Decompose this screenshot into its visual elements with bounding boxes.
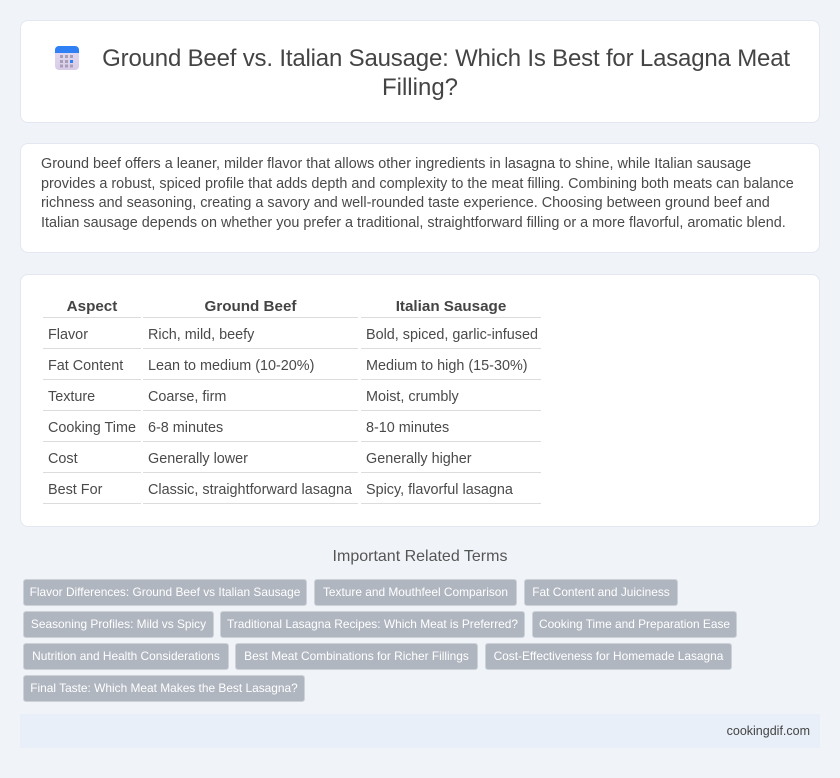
- comparison table: Coarse, firm: [148, 389, 226, 405]
- related term tags: Flavor Differences: Ground Beef vs Italian Sausage: [30, 585, 300, 599]
- related term tags: Seasoning Profiles: Mild vs Spicy: [31, 617, 206, 631]
- comparison table: Generally lower: [148, 451, 248, 467]
- related term tags: Traditional Lasagna Recipes: Which Meat is Preferred?: [227, 617, 518, 631]
- intro text: provides a robust, spiced profile that adds depth and complexity to the meat filling. Combining both meats can balance: [41, 176, 794, 192]
- intro text: Ground beef offers a leaner, milder flavor that allows other ingredients in lasagna to shine, while Italian sausage: [41, 156, 751, 172]
- comparison table: Aspect: [67, 298, 117, 315]
- comparison table: Ground Beef: [204, 298, 296, 315]
- intro text: [41, 156, 794, 231]
- comparison table: Texture: [48, 389, 95, 405]
- comparison table: [43, 298, 541, 504]
- comparison table: Lean to medium (10-20%): [148, 358, 314, 374]
- related term tags: Nutrition and Health Considerations: [32, 649, 220, 663]
- related term tags: [23, 579, 737, 702]
- comparison table: Cost: [48, 451, 78, 467]
- comparison table: 8-10 minutes: [366, 420, 449, 436]
- comparison table: Best For: [48, 482, 102, 498]
- panel: comparison table card: [20, 274, 820, 527]
- related terms heading: Important Related Terms: [333, 548, 507, 565]
- intro text: Italian sausage depends on whether you prefer a traditional, straightforward filling or a more flavorful, aromatic blend.: [41, 215, 786, 231]
- panel: intro card: [20, 143, 820, 253]
- title line 1: Ground Beef vs. Italian Sausage: Which Is Best for Lasagna Meat: [102, 45, 790, 72]
- comparison table: Moist, crumbly: [366, 389, 459, 405]
- comparison table: Generally higher: [366, 451, 472, 467]
- comparison table: Classic, straightforward lasagna: [148, 482, 352, 498]
- icon: calendar: [55, 46, 79, 70]
- related term tags: Final Taste: Which Meat Makes the Best Lasagna?: [30, 681, 298, 695]
- related term tags: Texture and Mouthfeel Comparison: [323, 585, 508, 599]
- panel: title card: [20, 20, 820, 123]
- comparison table: Italian Sausage: [396, 298, 506, 315]
- related term tags: Cost-Effectiveness for Homemade Lasagna: [494, 649, 723, 663]
- comparison table: Fat Content: [48, 358, 123, 374]
- footer source: cookingdif.com: [727, 724, 810, 738]
- title line 2: Filling?: [382, 74, 458, 101]
- intro text: richness and seasoning, creating a savory and well-rounded taste experience. Choosing between ground beef and: [41, 195, 770, 211]
- comparison table: Medium to high (15-30%): [366, 358, 528, 374]
- comparison table: Flavor: [48, 327, 88, 343]
- comparison table: Bold, spiced, garlic-infused: [366, 327, 538, 343]
- comparison table: 6-8 minutes: [148, 420, 223, 436]
- footer bar: [20, 714, 820, 748]
- related term tags: Cooking Time and Preparation Ease: [539, 617, 730, 631]
- comparison table: Rich, mild, beefy: [148, 327, 254, 343]
- related term tags: Best Meat Combinations for Richer Fillings: [244, 649, 469, 663]
- related term tags: Fat Content and Juiciness: [532, 585, 670, 599]
- comparison table: Cooking Time: [48, 420, 136, 436]
- comparison table: Spicy, flavorful lasagna: [366, 482, 513, 498]
